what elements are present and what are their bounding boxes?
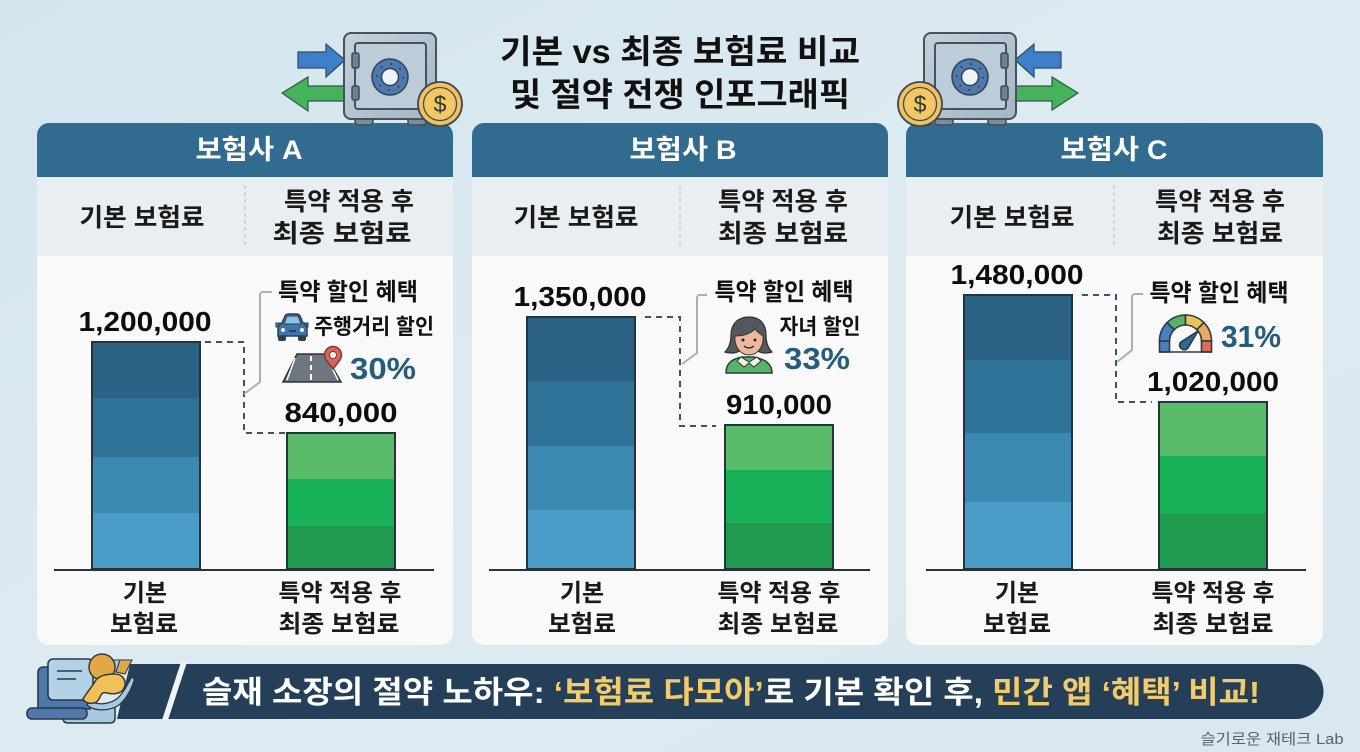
baseline and axis labels C: 보험료 xyxy=(983,611,1051,638)
panel: 보험사 A xyxy=(37,123,453,645)
bar: final A: 840,000 xyxy=(284,397,398,428)
callout C xyxy=(1117,280,1288,362)
icon: safe with arrows right xyxy=(898,33,1078,126)
bar: final B xyxy=(725,389,833,569)
column headings C xyxy=(906,177,1323,256)
baseline and axis labels A xyxy=(54,570,434,638)
bar: base C: 1,480,000 xyxy=(950,259,1084,290)
bar: final C: 1,020,000 xyxy=(1147,366,1279,397)
icon: safe with arrows right: $ xyxy=(914,91,927,117)
banner text: 슬재 소장의 절약 노하우: ‘보험료 다모아’ 로 기본 확인 후, 민간 앱 ‘혜택’ 비교! xyxy=(202,675,1260,710)
column headings B: 최종 보험료 xyxy=(718,220,848,248)
baseline and axis labels B xyxy=(489,570,870,638)
panel: 보험사 B xyxy=(472,123,888,645)
baseline and axis labels C: 특약 적용 후 xyxy=(1152,580,1274,607)
column headings B: 특약 적용 후 xyxy=(718,188,848,216)
title: 기본 vs 최종 보험료 비교 xyxy=(500,33,860,70)
callout A: 주행거리 할인 xyxy=(314,315,434,339)
baseline and axis labels B: 최종 보험료 xyxy=(718,611,838,638)
callout A xyxy=(244,279,434,394)
callout A: 특약 할인 혜택 xyxy=(278,279,418,306)
baseline and axis labels A: 특약 적용 후 xyxy=(278,580,402,607)
callout C: 31% xyxy=(1221,319,1281,354)
baseline and axis labels C: 최종 보험료 xyxy=(1152,611,1274,638)
connector B xyxy=(645,317,716,426)
panel header C xyxy=(906,123,1323,177)
baseline and axis labels B: 기본 xyxy=(560,580,604,607)
column headings B xyxy=(472,177,888,256)
title: 및 절약 전쟁 인포그래픽 xyxy=(510,76,850,113)
callout B: 특약 할인 혜택 xyxy=(714,279,854,306)
icon: safe with arrows left: $ xyxy=(434,91,447,117)
bar: base B: 1,350,000 xyxy=(514,281,646,312)
bar: final C xyxy=(1147,366,1279,569)
panel header B xyxy=(472,123,888,177)
icon: child xyxy=(725,317,772,373)
column headings C: 특약 적용 후 xyxy=(1155,188,1285,216)
bar: base A: 1,200,000 xyxy=(78,306,212,337)
panel header B: 보험사 B xyxy=(630,135,736,165)
icon: road with pin xyxy=(283,346,342,382)
bar: base C xyxy=(950,259,1084,569)
icon: safe with arrows left xyxy=(282,33,462,126)
icon: car xyxy=(276,314,308,341)
title xyxy=(500,33,860,113)
baseline and axis labels C: 기본 xyxy=(995,580,1039,607)
connector C xyxy=(1082,295,1152,402)
panel header A: 보험사 A xyxy=(196,135,302,165)
callout B: 자녀 할인 xyxy=(780,315,860,339)
callout C: 특약 할인 혜택 xyxy=(1150,280,1288,307)
baseline and axis labels B: 보험료 xyxy=(548,611,616,638)
bar: base B xyxy=(514,281,646,569)
baseline and axis labels B: 특약 적용 후 xyxy=(718,580,840,607)
watermark: 슬기로운 재테크 Lab xyxy=(1200,731,1344,748)
baseline and axis labels A: 보험료 xyxy=(110,611,178,638)
column headings A: 기본 보험료 xyxy=(80,204,204,232)
column headings C: 최종 보험료 xyxy=(1157,220,1283,248)
panel header C: 보험사 C xyxy=(1060,135,1168,165)
column headings B: 기본 보험료 xyxy=(514,204,638,232)
panel header A xyxy=(37,123,453,177)
bar: base A xyxy=(78,306,212,569)
bottom banner xyxy=(117,662,1323,720)
icon: gauge xyxy=(1159,315,1212,352)
baseline and axis labels A: 최종 보험료 xyxy=(278,611,400,638)
bar: final B: 910,000 xyxy=(726,389,832,420)
connector A xyxy=(205,342,286,433)
column headings A xyxy=(37,177,453,256)
column headings C: 기본 보험료 xyxy=(950,204,1074,232)
icon: person at laptop xyxy=(27,654,134,723)
callout B: 33% xyxy=(784,341,850,376)
panel: 보험사 C xyxy=(906,123,1323,645)
callout B xyxy=(682,279,860,376)
baseline and axis labels A: 기본 xyxy=(123,580,167,607)
column headings A: 최종 보험료 xyxy=(272,220,412,248)
column headings A: 특약 적용 후 xyxy=(284,188,414,216)
bar: final A xyxy=(284,397,398,569)
baseline and axis labels C xyxy=(926,570,1306,638)
callout A: 30% xyxy=(350,351,416,386)
